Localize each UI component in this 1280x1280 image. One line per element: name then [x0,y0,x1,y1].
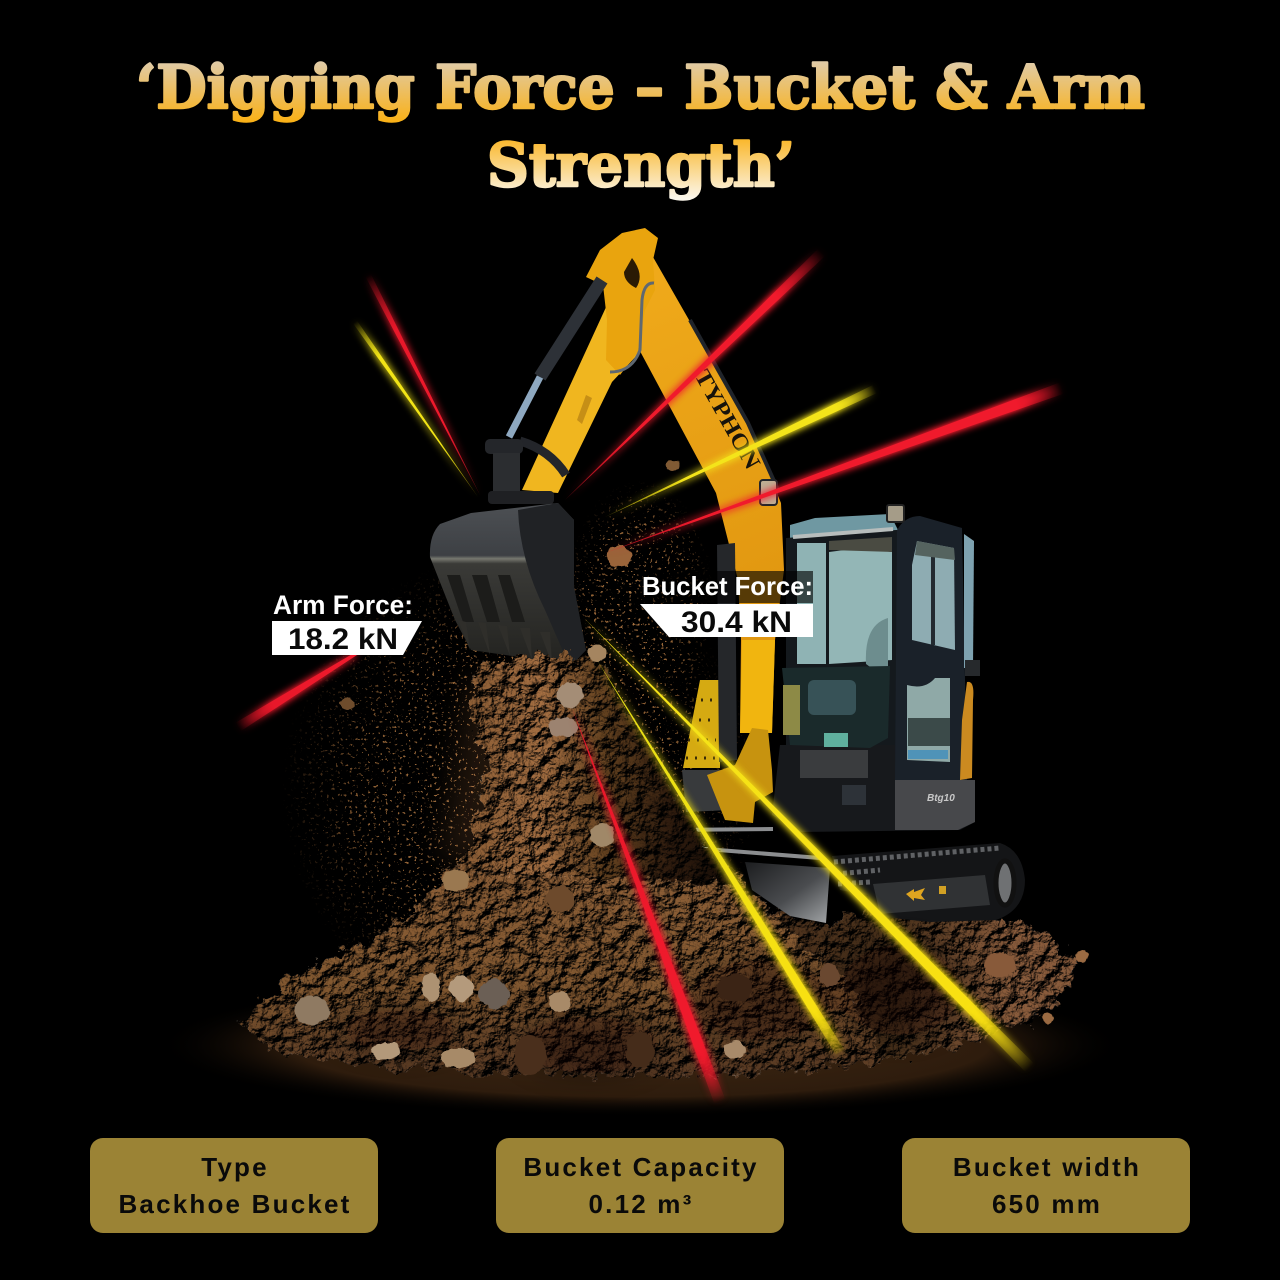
card: bucket width [902,1138,1190,1233]
rock: mound lower 2 [441,1048,475,1068]
interior teal floor box [824,733,848,747]
rock: stream left [442,869,470,891]
bucket force label: Bucket Force: [642,571,813,601]
dark boom side plate [717,543,737,762]
yellow beam lower right [584,618,1034,1072]
swing bracket yellow panel [683,680,720,768]
interior yellow reflection [783,685,800,735]
rock: right small [1042,1012,1054,1024]
knuckle hole [624,258,640,288]
boom foot bracket [707,728,773,823]
rear orange strip [960,682,973,780]
red beam upper centre [565,248,826,500]
top rail of boom [690,320,778,490]
dirt pile [155,480,1125,1117]
swing bracket speckles [686,700,716,758]
yellow beam lower centre [597,660,844,1055]
hollow: far right [840,945,960,1035]
rock: centre right dark [717,974,753,1002]
card label: Bucket Capacity [523,1152,759,1182]
hydraulic hose [610,283,654,372]
track crawler [832,843,1025,922]
TYPHON lettering: TYPHON [690,365,765,474]
boom lamp [760,480,777,505]
falling dirt stream [460,655,740,885]
airborne dirt spray [280,550,760,1030]
card value: 0.12 m³ [588,1189,694,1219]
yellow arrow marking [906,888,925,901]
rock: right edge [1076,950,1088,964]
rock: near bucket [588,645,606,661]
door upper glass [912,541,955,650]
dozer blade rods [663,829,820,858]
card: type [90,1138,378,1233]
windshield right pane [829,548,892,664]
rock: stream tan [590,823,614,847]
link upright bracket [493,453,520,498]
cab [782,505,980,780]
bucket force ribbon [640,604,813,637]
title line 2: Strength’ [487,131,795,201]
arm force value: 18.2 kN [288,623,398,656]
rocks [295,460,1088,1075]
cab ceiling panel [829,537,892,552]
machine badge: Btg10 [927,793,955,804]
rock: small left [341,698,355,710]
boom (orange) [630,257,784,733]
excavator [430,228,1025,923]
dozer blade [745,862,830,923]
track link highlights [834,848,1000,884]
card label: Bucket width [953,1152,1141,1182]
door lower glass dark band [908,718,950,746]
card value: 650 mm [992,1189,1102,1219]
operator seat [866,618,888,680]
arm cylinder [540,280,602,377]
seat console [808,680,856,715]
red beam lower [572,708,726,1104]
stick / arm [522,305,640,493]
rock: lower mid [626,1032,654,1068]
red beam arm force [235,653,357,731]
arm force label: Arm Force: [273,590,413,620]
rock: far right [984,953,1016,977]
bucket shell [430,503,586,667]
undercarriage track [832,843,1025,922]
rock: small top [666,460,680,472]
card label: Type [201,1152,269,1182]
yellow beam upper right [605,385,877,517]
rear side glass [964,534,974,668]
rock: mound lower [372,1042,400,1060]
title line 1: ‘Digging Force – Bucket & Arm [136,53,1145,123]
yellow beam upper left [353,321,478,497]
far dirt mound on right [700,900,1078,1062]
red beam upper left [365,274,480,495]
ground shadow glow [155,973,1125,1117]
small yellow tag [939,886,946,894]
card background [902,1138,1190,1233]
rock: large airborne [557,682,583,708]
door handle block [965,660,980,676]
control labels on body [842,785,866,805]
door lower glass [907,678,950,762]
card background [90,1138,378,1233]
track side frame [873,875,990,914]
dirt spray near bucket [565,480,715,720]
interior controls [782,666,890,748]
card: bucket capacity [496,1138,784,1233]
work lamp [887,505,904,522]
callout: bucket force [640,571,813,639]
door top dark glass band [915,541,955,560]
bucket side face [518,503,586,667]
top knuckle [586,228,658,375]
callout: arm force [272,590,422,656]
rock: mound base right [724,1041,746,1059]
cab roof [790,514,898,538]
rock: mound tan 2 [422,972,440,1002]
bucket linkage [485,439,566,504]
spec cards [90,1138,1190,1233]
hollow: left base [340,1010,460,1050]
card value: Backhoe Bucket [118,1189,352,1219]
counter body lower [772,745,975,832]
door lower glass blue band [908,750,948,759]
swing frame dark [682,770,730,812]
rock: lower left [514,1035,546,1075]
roof rail [793,529,893,537]
warning sticker [577,395,592,424]
bucket rib panels [447,575,525,622]
boom lower yellow band [740,640,775,733]
hollow: lower centre [520,1017,660,1073]
rock: mound tan 1 [449,975,473,1001]
rock: airborne orange [607,545,631,567]
force beams [235,248,1064,1104]
door window divider [931,556,935,645]
hollow: centre right [690,960,830,1040]
grey rear body panel [895,780,975,830]
rock: mound left [295,995,329,1025]
rear wheel [996,861,1014,905]
card background [496,1138,784,1233]
red beam right [605,382,1064,553]
bucket [430,503,586,667]
bucket force label backing [640,571,813,603]
arm force ribbon [272,621,422,655]
bucket teeth [458,620,552,664]
cylinder rod [509,377,540,437]
link cross pin [485,439,523,454]
dark hollows on mound [340,945,960,1073]
front windshield frame [786,530,898,745]
grey body panel centre [800,750,868,778]
cab door [895,516,967,780]
rock: mound upper [546,886,574,912]
bucket force value: 30.4 kN [681,606,792,639]
bucket hinge [488,491,554,504]
title [136,53,1145,201]
rock: falling stone [548,717,578,737]
soft haze behind falling stream [440,680,690,860]
rock: right mid [820,963,840,987]
main dirt mound [239,850,884,1077]
curved link [520,441,566,475]
rock: mound gray [479,979,509,1009]
rock: mound centre [549,992,571,1012]
windshield glass [797,543,826,664]
